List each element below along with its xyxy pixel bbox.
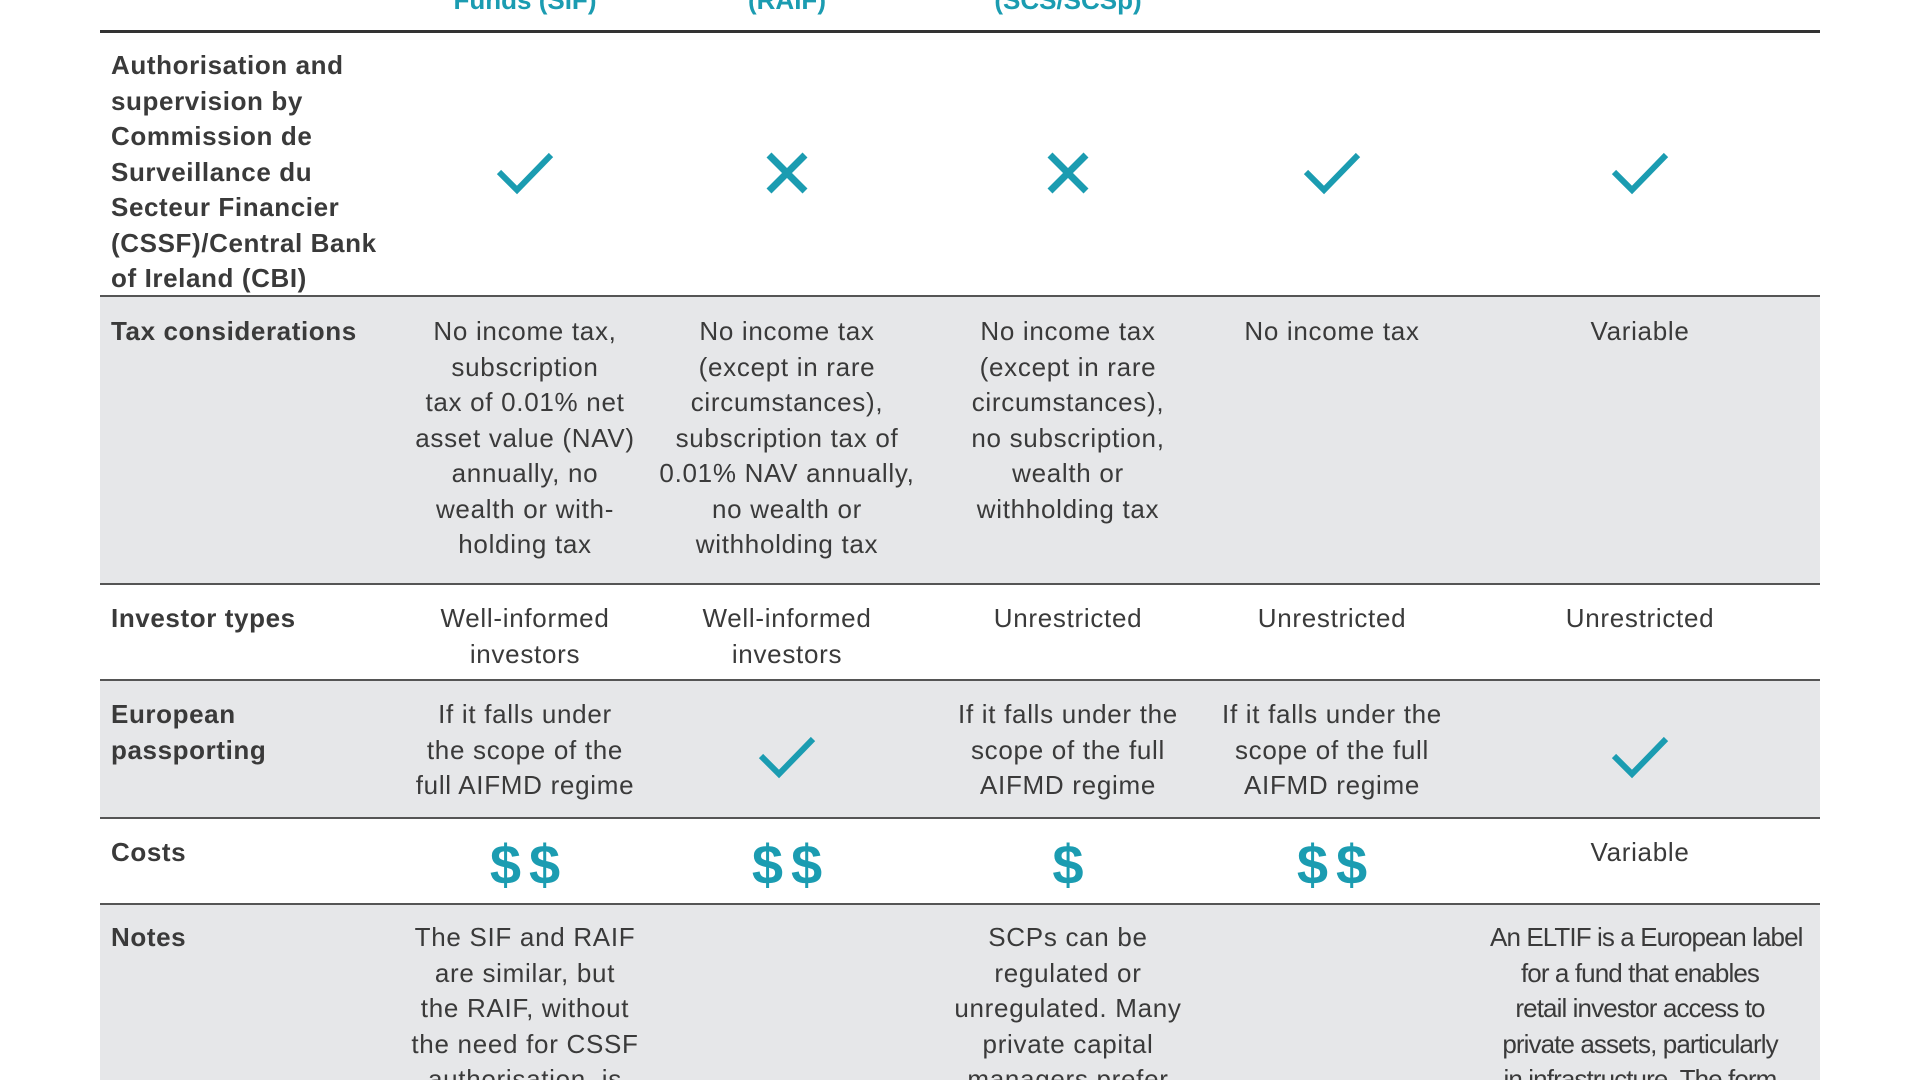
row: notes [111, 922, 1803, 1080]
row: notes: SCPs can be [988, 922, 1148, 952]
row: notes: for a fund that enables [1521, 958, 1759, 988]
row: european passporting: European [111, 699, 236, 729]
row: notes: are similar, but [435, 958, 615, 988]
row: tax: No income tax [699, 316, 875, 346]
row: authorisation: Authorisation and [111, 50, 344, 80]
row: tax: tax of 0.01% net [425, 387, 625, 417]
row: investor types: investors [470, 638, 580, 668]
row: authorisation: supervision by [111, 86, 303, 116]
row: notes: unregulated. Many [954, 993, 1182, 1023]
row: costs: $$ [490, 833, 568, 896]
row: notes: The SIF and RAIF [415, 922, 635, 952]
row: costs: $$ [752, 833, 830, 896]
row: investor types: Unrestricted [1566, 603, 1714, 633]
row: costs: Costs [111, 837, 186, 867]
row: tax: (except in rare [980, 352, 1156, 382]
row: tax: withholding tax [696, 529, 878, 559]
row: tax: wealth or with- [436, 494, 614, 524]
row: tax: No income tax [980, 316, 1156, 346]
row: european passporting: If it falls under the [1222, 699, 1442, 729]
icon: check RAIF [758, 736, 816, 778]
row: tax: holding tax [458, 529, 592, 559]
row: notes: the RAIF, without [421, 993, 629, 1023]
row: tax: circumstances), [691, 387, 883, 417]
row: notes: private assets, particularly [1502, 1028, 1778, 1058]
row: european passporting: scope of the full [971, 734, 1165, 764]
row: investor types: Unrestricted [994, 603, 1142, 633]
row: authorisation: (CSSF)/Central Bank [111, 228, 377, 258]
icon: check col4 [1304, 152, 1360, 194]
row: european passporting: AIFMD regime [980, 770, 1156, 800]
row: costs: $ [1052, 833, 1092, 896]
icon: check SIF [496, 152, 554, 194]
row: tax: (except in rare [699, 352, 875, 382]
row: notes: An ELTIF is a European label [1490, 922, 1803, 952]
row: tax: subscription tax of [676, 422, 898, 452]
row: costs: $$ [1297, 833, 1375, 896]
row: tax [111, 316, 1690, 559]
row: notes: Notes [111, 922, 186, 952]
row: european passporting: If it falls under the [958, 699, 1178, 729]
row: tax: Tax considerations [111, 316, 357, 346]
row: investor types: Investor types [111, 603, 296, 633]
row: investor types: Well-informed [440, 603, 610, 633]
grey bands [100, 296, 1820, 584]
row: tax: withholding tax [977, 494, 1159, 524]
icon: cross SCS [1048, 152, 1088, 194]
row: european passporting: If it falls under [438, 699, 612, 729]
row: tax: 0.01% NAV annually, [659, 458, 915, 488]
row: tax: Variable [1590, 316, 1690, 346]
row: notes: private capital [983, 1028, 1153, 1058]
row: european passporting: passporting [111, 734, 266, 764]
row: tax: annually, no [452, 458, 598, 488]
icon: check col5 [1612, 736, 1668, 778]
row: tax: no wealth or [712, 494, 862, 524]
row: tax: No income tax [1244, 316, 1420, 346]
row: investor types: Well-informed [702, 603, 872, 633]
column headers (cut off) [454, 0, 1142, 15]
row: tax: No income tax, [433, 316, 617, 346]
row: european passporting: the scope of the [427, 734, 623, 764]
row: investor types: Unrestricted [1258, 603, 1406, 633]
row: european passporting [111, 699, 1668, 800]
row: costs [111, 833, 1690, 896]
row: european passporting: scope of the full [1235, 734, 1429, 764]
row: authorisation: of Ireland (CBI) [111, 263, 307, 293]
row: notes: regulated or [994, 958, 1142, 988]
row: tax: no subscription, [971, 422, 1165, 452]
row: investor types [111, 603, 1714, 668]
row: authorisation: Surveillance du [111, 156, 312, 186]
icon: check col5 [1612, 152, 1668, 194]
row: authorisation: Commission de [111, 121, 312, 151]
row: european passporting: AIFMD regime [1244, 770, 1420, 800]
row: authorisation: Secteur Financier [111, 192, 339, 222]
row: costs: Variable [1590, 837, 1690, 867]
row: tax: subscription [451, 352, 599, 382]
icon: cross RAIF [766, 152, 808, 194]
row: investor types: investors [732, 638, 842, 668]
row: tax: asset value (NAV) [415, 422, 635, 452]
row: tax: wealth or [1012, 458, 1124, 488]
row: notes: retail investor access to [1515, 993, 1765, 1023]
row: european passporting: full AIFMD regime [416, 770, 634, 800]
row: authorisation [111, 50, 1668, 293]
row: notes: the need for CSSF [411, 1028, 639, 1058]
row: tax: circumstances), [972, 387, 1164, 417]
